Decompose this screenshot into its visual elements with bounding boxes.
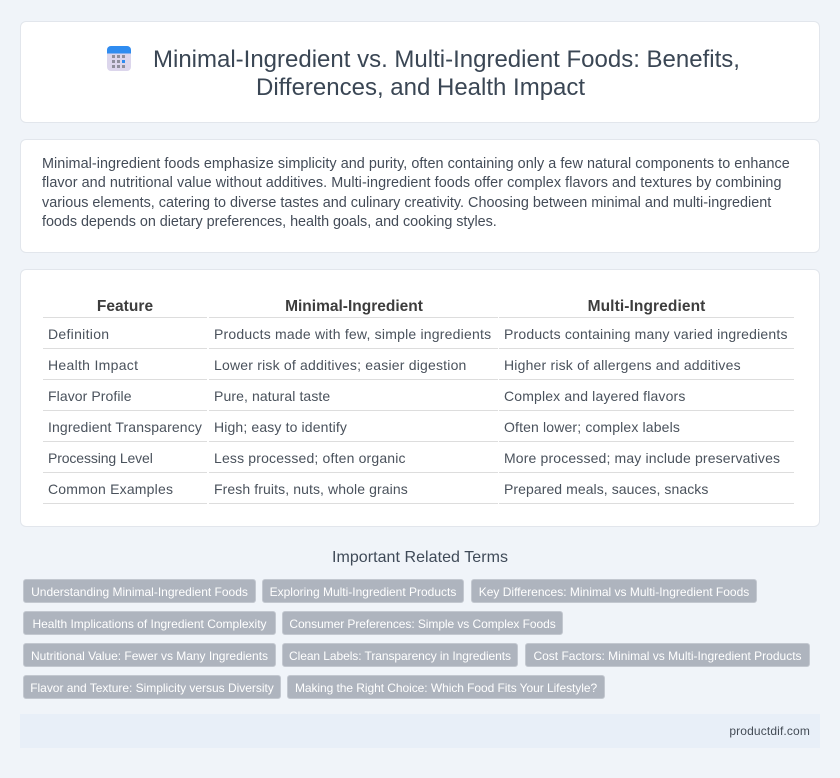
intro text: various elements, catering to diverse tastes and culinary creativity. Choosing between minimal and multi-ingredient (42, 195, 771, 211)
comparison table: Lower risk of additives; easier digestion (214, 357, 467, 373)
title: Differences, and Health Impact (256, 74, 585, 101)
comparison table: Higher risk of allergens and additives (504, 357, 741, 373)
comparison table: Feature (97, 298, 153, 315)
comparison table: More processed; may include preservatives (504, 450, 780, 466)
panel: intro (20, 139, 820, 253)
related term tags: Nutritional Value: Fewer vs Many Ingredients (31, 649, 268, 663)
title: Minimal-Ingredient vs. Multi-Ingredient Foods: Benefits, (153, 46, 740, 72)
comparison table: Flavor Profile (48, 388, 132, 404)
related term tags: Exploring Multi-Ingredient Products (270, 585, 456, 599)
comparison table: High; easy to identify (214, 419, 347, 435)
comparison table: Less processed; often organic (214, 450, 406, 466)
related term tags: Cost Factors: Minimal vs Multi-Ingredient Products (533, 649, 802, 663)
related term tags: Health Implications of Ingredient Complexity (32, 617, 267, 631)
comparison table: Ingredient Transparency (48, 419, 202, 435)
comparison table: Definition (48, 326, 109, 342)
intro text: Minimal-ingredient foods emphasize simplicity and purity, often containing only a few natural components to enhance (42, 156, 790, 172)
related term tags: Making the Right Choice: Which Food Fits Your Lifestyle? (295, 681, 597, 695)
related term tags (23, 579, 810, 699)
comparison table: Prepared meals, sauces, snacks (504, 481, 708, 497)
footer bar (20, 714, 820, 748)
comparison table: Common Examples (48, 481, 173, 497)
comparison table: Products containing many varied ingredients (504, 326, 788, 342)
heading: related terms: Important Related Terms (332, 549, 508, 566)
comparison table: Pure, natural taste (214, 388, 330, 404)
related term tags: Understanding Minimal-Ingredient Foods (31, 585, 248, 599)
comparison table: Multi-Ingredient (588, 298, 705, 315)
related term tags: Key Differences: Minimal vs Multi-Ingredient Foods (479, 585, 749, 599)
related term tags: Flavor and Texture: Simplicity versus Diversity (30, 681, 274, 695)
title (153, 46, 740, 101)
related term tags: Clean Labels: Transparency in Ingredients (289, 649, 511, 663)
intro text (42, 156, 790, 230)
comparison table: Health Impact (48, 357, 138, 373)
intro text: foods depends on dietary preferences, health goals, and cooking styles. (42, 214, 497, 230)
panel: comparison table (20, 269, 820, 527)
comparison table: Processing Level (48, 450, 153, 466)
comparison table: Fresh fruits, nuts, whole grains (214, 481, 408, 497)
related term tags: Consumer Preferences: Simple vs Complex Foods (289, 617, 556, 631)
comparison table: Complex and layered flavors (504, 388, 685, 404)
comparison table: Products made with few, simple ingredients (214, 326, 491, 342)
icon: calendar (107, 46, 131, 71)
intro text: flavor and nutritional value without additives. Multi-ingredient foods offer complex flavors and textures by combining (42, 175, 782, 191)
footer source: productdif.com (729, 724, 810, 738)
header panel (20, 21, 820, 123)
comparison table: Minimal-Ingredient (285, 298, 423, 315)
comparison table: Often lower; complex labels (504, 419, 680, 435)
comparison table (43, 298, 794, 504)
